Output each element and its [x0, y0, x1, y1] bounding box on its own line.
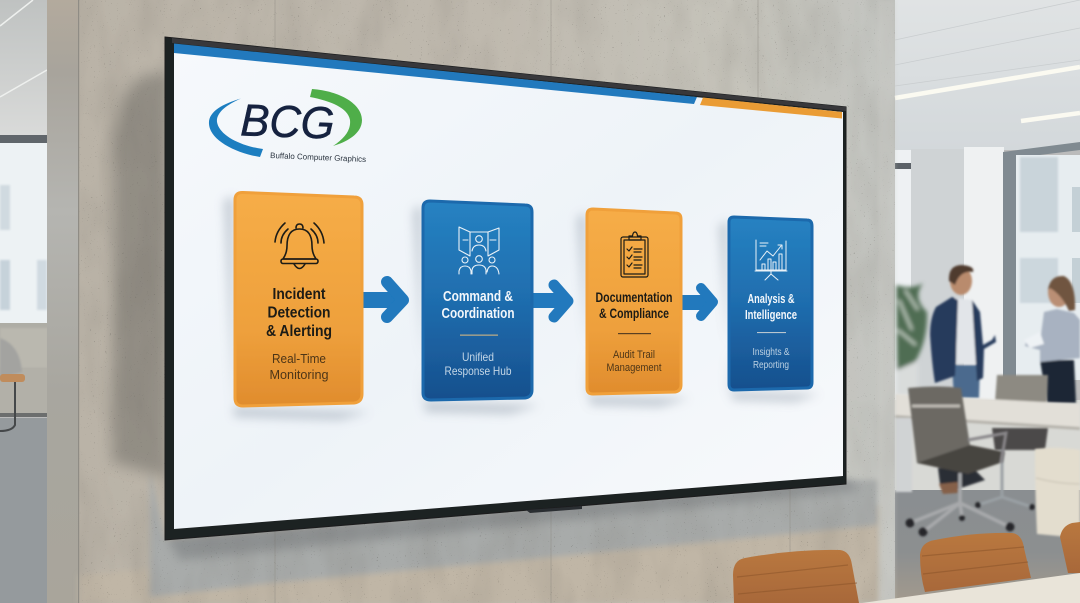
- left office background: [0, 0, 48, 603]
- leather chair right: [1060, 522, 1080, 573]
- wall shadow behind display: [112, 72, 168, 478]
- cabinet: [1035, 448, 1080, 538]
- subheading: Real-Time: [272, 351, 326, 366]
- foreground table: [862, 573, 1080, 603]
- subheading: [444, 350, 512, 378]
- subheading: Audit Trail: [613, 349, 655, 361]
- card shadows: [224, 196, 820, 420]
- subheading: Management: [606, 362, 662, 374]
- logo lettering: BCG: [240, 94, 335, 149]
- logo green swoosh: [310, 89, 362, 146]
- arrow 3: [682, 288, 713, 316]
- logo tagline: Buffalo Computer Graphics: [270, 151, 366, 164]
- panel: analysis and intelligence: [729, 217, 812, 390]
- heading: Incident: [272, 286, 326, 303]
- heading: Coordination: [442, 306, 514, 322]
- panel: documentation and compliance: [587, 209, 681, 394]
- blue header stripe: [174, 44, 697, 104]
- logo: Buffalo Computer Graphics: [209, 89, 366, 164]
- heading: [596, 290, 672, 321]
- icon: command centre: [459, 227, 499, 274]
- heading: & Alerting: [266, 323, 332, 340]
- heading: Documentation: [596, 290, 672, 305]
- ceiling light strips: [895, 67, 1080, 121]
- concrete wall: [47, 0, 895, 603]
- heading: [266, 286, 332, 340]
- heading: [442, 289, 514, 322]
- people in meeting: [930, 265, 1080, 403]
- orange header stripe: [700, 98, 842, 118]
- leather chair left: [733, 550, 859, 603]
- wall display: [165, 37, 846, 540]
- subheading: Response Hub: [444, 364, 512, 378]
- display frame: [165, 37, 846, 540]
- front office chair: [906, 386, 1014, 536]
- arrow 1: [363, 282, 403, 317]
- subheading: Monitoring: [270, 367, 328, 382]
- display mount: [526, 506, 582, 513]
- heading: Intelligence: [745, 308, 797, 322]
- heading: & Compliance: [599, 306, 669, 321]
- pillar edge right: [878, 0, 895, 603]
- heading: [745, 292, 797, 322]
- subheading: Unified: [462, 350, 494, 364]
- panel: command and coordination: [423, 201, 532, 400]
- panel: incident detection and alerting: [235, 192, 362, 406]
- icon: alert bell: [275, 223, 324, 268]
- logo blue swoosh: [209, 98, 263, 157]
- subheading: [752, 346, 790, 371]
- leather chair centre: [920, 533, 1031, 592]
- screen panel: [174, 44, 843, 529]
- subheading: Insights &: [752, 346, 790, 358]
- subheading: [606, 349, 662, 374]
- plant: [896, 283, 927, 396]
- icon: presentation chart: [755, 240, 787, 280]
- right office background: [895, 0, 1080, 603]
- foreground leather chairs and table: [733, 522, 1080, 603]
- heading: Detection: [268, 304, 330, 322]
- subheading: Reporting: [753, 359, 789, 371]
- conference table and rear chair: [895, 375, 1080, 510]
- arrow 2: [533, 285, 568, 317]
- subheading: [270, 351, 328, 382]
- icon: clipboard checklist: [621, 232, 648, 277]
- heading: Command &: [443, 289, 513, 305]
- heading: Analysis &: [748, 292, 794, 306]
